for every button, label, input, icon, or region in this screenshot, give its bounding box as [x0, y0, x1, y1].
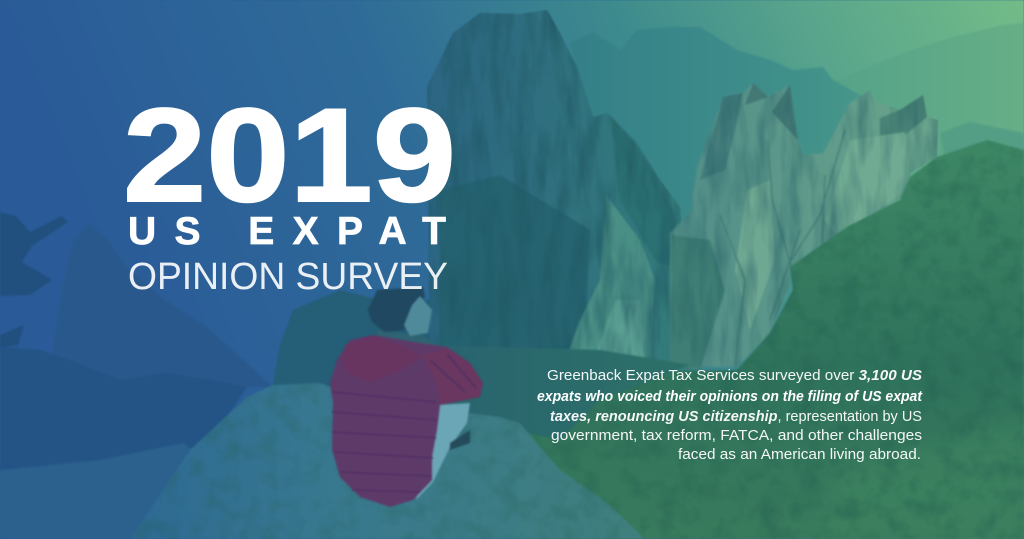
description paragraph: expats who voiced their opinions on the filing of US expat — [537, 388, 923, 405]
texture: foliage — [614, 157, 1024, 538]
background photo: pine branches at left — [0, 212, 68, 348]
title block — [123, 82, 456, 298]
face — [404, 296, 432, 336]
texture: boulder surface — [134, 384, 618, 539]
subtitle: OPINION SURVEY: OPINION SURVEY — [128, 256, 448, 298]
hair — [368, 287, 425, 332]
description paragraph: taxes, renouncing US citizenship, representation by US — [550, 408, 922, 425]
background photo: pine canopy and slope at right — [520, 140, 1024, 539]
background photo: grass at lower left — [0, 443, 260, 539]
shoe — [450, 430, 470, 450]
texture: crag rock cracks — [665, 80, 945, 370]
seated person in red jacket — [330, 287, 483, 507]
texture: mountain rock streaks — [428, 10, 680, 358]
background photo: lower slope behind person — [430, 345, 690, 440]
background photo: rocky crag on the right — [670, 83, 938, 370]
legs — [416, 403, 470, 500]
background photo: central mountain peak — [427, 10, 690, 370]
background photo: dark forest behind boulder — [0, 347, 247, 472]
hood — [343, 336, 422, 382]
background photo: misty blue mountain at left — [53, 222, 273, 387]
background photo: distant peaks and ridge — [570, 23, 1024, 260]
description paragraph — [537, 367, 923, 463]
arm — [422, 347, 483, 405]
description paragraph: Greenback Expat Tax Services surveyed over 3,100 US — [547, 367, 922, 384]
jacket — [330, 335, 483, 507]
jacket quilting — [332, 354, 476, 492]
title: 2019: 2019 — [123, 82, 456, 230]
subtitle: US EXPAT: US EXPAT — [128, 210, 446, 253]
description paragraph: faced as an American living abroad. — [678, 446, 921, 463]
description paragraph: government, tax reform, FATCA, and other challenges — [551, 427, 922, 444]
background photo: boulder foreground — [130, 383, 645, 539]
neck and collar — [375, 330, 445, 352]
